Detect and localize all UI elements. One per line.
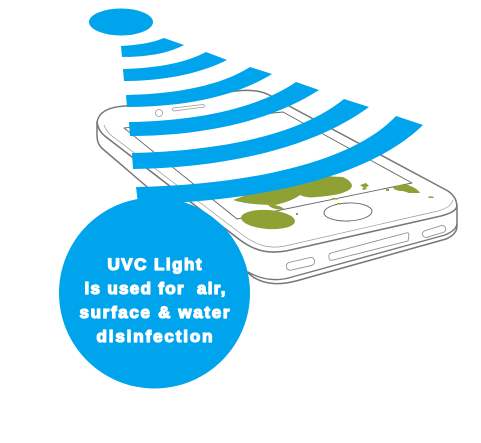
small stain below central stain [268, 205, 284, 209]
phone lower edge line [248, 224, 457, 280]
green contamination stains [233, 175, 434, 231]
home button [324, 202, 372, 222]
UVC light waves [121, 38, 423, 204]
phone screen [124, 112, 412, 219]
wave 6 [136, 116, 423, 204]
callout text: surface & water [80, 303, 230, 322]
phone side band line [104, 125, 453, 247]
right side button [422, 225, 447, 238]
speaker slot [172, 104, 204, 111]
phone outer body [97, 90, 457, 284]
central stain [233, 175, 352, 205]
large oval stain [240, 208, 296, 231]
bottom connector port [329, 233, 409, 260]
wave 1 [121, 38, 184, 57]
wave 3 [126, 67, 272, 107]
callout text: disinfection [96, 327, 212, 346]
smartphone illustration [97, 90, 457, 284]
front camera [156, 110, 162, 116]
callout text: UVC Light [108, 255, 202, 274]
callout circle [59, 198, 250, 388]
left side button [285, 257, 316, 271]
droplets [296, 183, 434, 215]
wave 4 [129, 82, 319, 136]
callout text [80, 255, 230, 346]
UVC light source ellipse [89, 8, 153, 36]
phone front face edge [97, 122, 457, 252]
wave 5 [132, 99, 369, 169]
wave 2 [123, 52, 227, 81]
right stain [393, 185, 420, 193]
callout text: is used for air, [84, 279, 226, 298]
